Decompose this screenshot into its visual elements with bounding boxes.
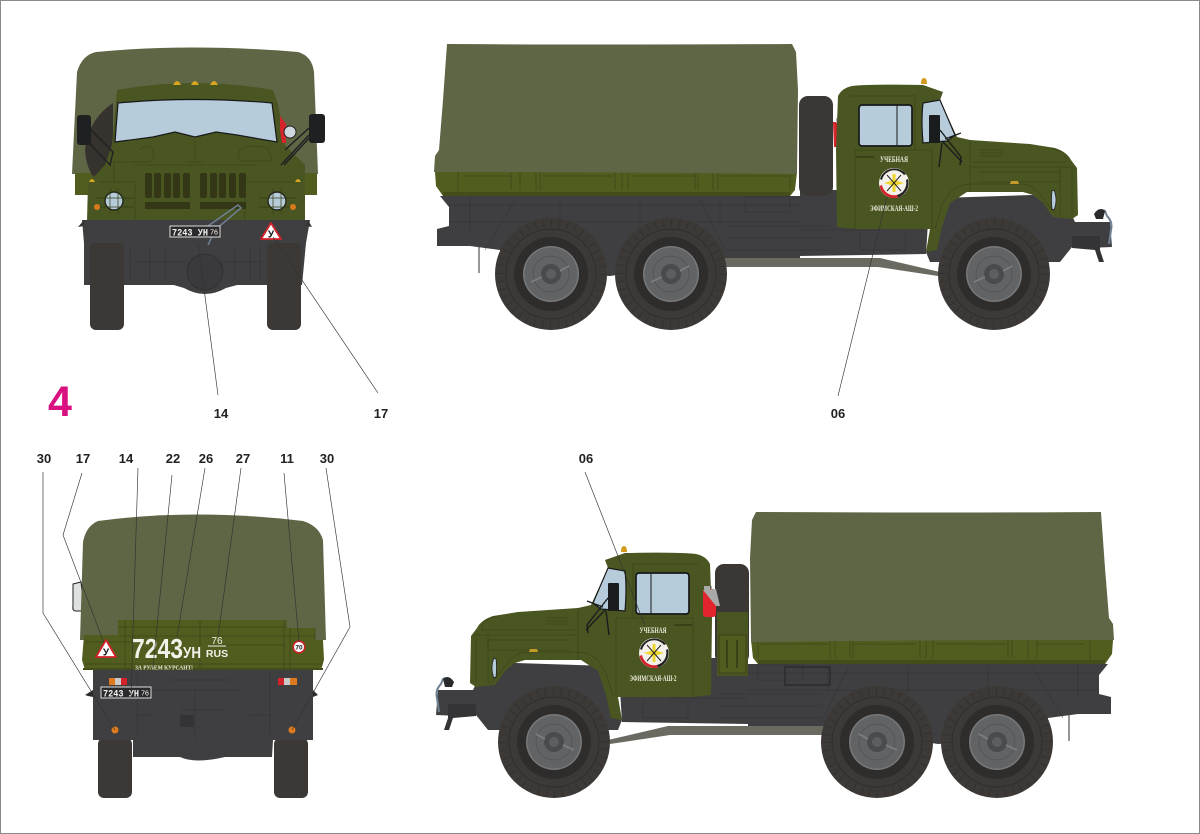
door text, right side: [870, 155, 918, 213]
callout numbers: 17: [76, 451, 90, 466]
tailgate registration number: УН: [183, 645, 201, 662]
warning triangle, front: [261, 223, 281, 240]
tailgate registration number: 76: [211, 636, 223, 647]
numeral: scheme number 4: 4: [48, 378, 72, 426]
callout numbers: 11: [280, 451, 294, 466]
callout numbers: 14: [119, 451, 134, 466]
callout numbers: 17: [374, 406, 388, 421]
tailgate registration number: 7243: [132, 633, 183, 664]
emblem, right door: [879, 168, 909, 198]
door text, left side: ЭФИМСКАЯ-АШ-2: [630, 674, 676, 683]
truck: front view: [72, 48, 325, 330]
truck: side view, right side: [434, 44, 1112, 330]
callout numbers: [37, 406, 845, 466]
licence plate, rear: 7243 УН: [103, 688, 139, 700]
licence plate, front: 76: [210, 230, 218, 236]
callout numbers: 26: [199, 451, 213, 466]
callout numbers: 27: [236, 451, 250, 466]
door text, right side: УЧЕБНАЯ: [880, 155, 908, 164]
leader lines: [43, 197, 887, 730]
warning triangle, rear: [96, 640, 116, 658]
speed limit sign: 70: [295, 645, 303, 652]
warning triangle, front: У: [268, 230, 275, 240]
callout numbers: 06: [831, 406, 845, 421]
icon: rear light clusters: [109, 678, 297, 685]
icon: fire extinguisher: [703, 586, 720, 617]
callout numbers: 14: [214, 406, 229, 421]
licence plate, front: 7243 УН: [172, 228, 208, 240]
callout numbers: 30: [320, 451, 334, 466]
callout numbers: 06: [579, 451, 593, 466]
emblem, left door: [639, 638, 669, 668]
door text, left side: [630, 626, 676, 683]
warning triangle, rear: У: [103, 648, 110, 658]
canvas tilt, front view: [72, 48, 318, 174]
slogan on tailgate: ЗА РУЛЕМ КУРСАНТ!: [135, 666, 193, 672]
callout numbers: 22: [166, 451, 180, 466]
tailgate registration number: [132, 633, 228, 664]
door text, left side: УЧЕБНАЯ: [640, 626, 667, 635]
truck: side view, left side: [436, 512, 1114, 798]
speed limit sign: [293, 641, 305, 653]
icon: roof marker lights: [89, 81, 301, 182]
callout numbers: 30: [37, 451, 51, 466]
icon: headlights: [94, 188, 297, 214]
icon: rear reflectors: [112, 726, 296, 734]
licence plate, rear: 76: [141, 690, 149, 698]
truck: rear view: [73, 514, 326, 798]
tailgate registration number: RUS: [206, 648, 228, 660]
door text, right side: ЭФИМСКАЯ-АШ-2: [870, 204, 918, 213]
